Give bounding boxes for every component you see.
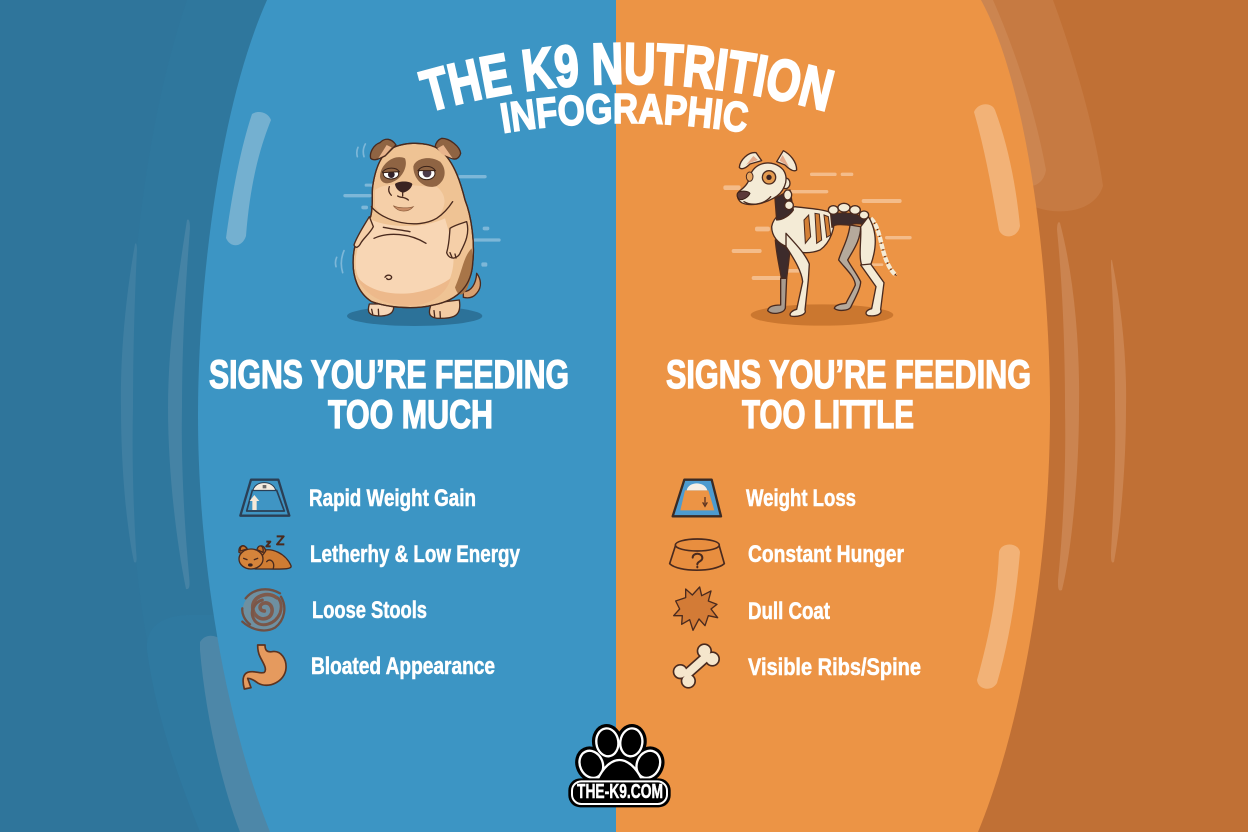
illustration: overweight dog bbox=[335, 138, 501, 326]
heading: signs of feeding too much: SIGNS YOU’RE FEEDING bbox=[209, 353, 569, 397]
text: constant hunger: Constant Hunger bbox=[748, 541, 904, 568]
title: The K9 Nutrition Infographic: INFOGRAPHIC bbox=[500, 93, 748, 134]
icon: scale with down arrow bbox=[673, 480, 721, 516]
text: dull coat: Dull Coat bbox=[748, 598, 830, 625]
heading: signs of feeding too little: SIGNS YOU’RE FEEDING bbox=[666, 353, 1031, 397]
heading: signs of feeding too little bbox=[666, 353, 1031, 437]
text: loose stools: Loose Stools bbox=[312, 597, 427, 624]
heading: signs of feeding too much: TOO MUCH bbox=[328, 393, 493, 437]
text: visible ribs and spine: Visible Ribs/Spine bbox=[748, 654, 921, 681]
icon: stomach bbox=[243, 645, 286, 689]
text: lethargy and low energy: Letherhy & Low Energy bbox=[310, 541, 521, 568]
icon: swirl bbox=[242, 589, 284, 631]
text: rapid weight gain: Rapid Weight Gain bbox=[309, 485, 476, 512]
icon: sleeping dog bbox=[239, 536, 291, 569]
icon: empty bowl bbox=[670, 539, 724, 570]
logo: paw print with the-k9.com badge: THE-K9.COM bbox=[577, 781, 663, 803]
list: too much signs bbox=[239, 480, 521, 689]
icon: scale with up arrow bbox=[240, 480, 289, 516]
logo: paw print with the-k9.com badge bbox=[568, 727, 671, 807]
list: too little signs bbox=[670, 480, 921, 687]
heading: signs of feeding too little: TOO LITTLE bbox=[742, 393, 914, 437]
text: bloated appearance: Bloated Appearance bbox=[311, 653, 495, 680]
icon: bone bbox=[674, 645, 718, 687]
text: weight loss: Weight Loss bbox=[746, 485, 856, 512]
heading: signs of feeding too much bbox=[209, 353, 569, 437]
title: The K9 Nutrition Infographic: THE K9 NUTRITION bbox=[416, 42, 835, 112]
icon: dull fur bbox=[674, 587, 718, 630]
illustration: underweight skeletal dog bbox=[723, 151, 912, 326]
